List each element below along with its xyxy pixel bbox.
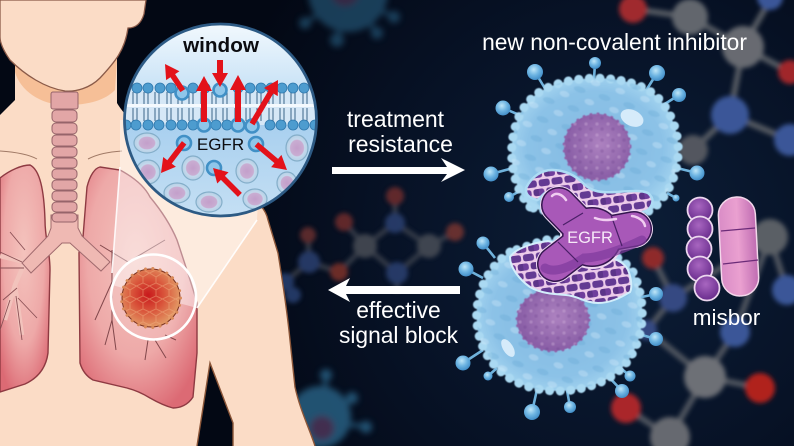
- arrow: left: [328, 278, 460, 302]
- EGFR shading: [545, 240, 642, 270]
- tumor mass: [122, 268, 180, 328]
- bottom cell receptors: [456, 236, 663, 420]
- background cell: bottom: [289, 369, 372, 446]
- magnifier label: EGFR: EGFR: [197, 135, 244, 154]
- inhibitor capsule: [717, 196, 760, 297]
- human body: [0, 0, 315, 446]
- EGFR label: EGFR: [567, 229, 613, 247]
- bottom cell highlight: [498, 337, 518, 359]
- bottom cell texture: [477, 240, 642, 391]
- left lung: [0, 165, 50, 392]
- top cell highlight: [618, 106, 646, 130]
- bottom cell body: [477, 240, 642, 391]
- arrow: right: [332, 158, 465, 182]
- top cell receptors: [484, 57, 704, 202]
- EGFR outer halo: [555, 205, 634, 267]
- right lung: [79, 167, 197, 408]
- label: effective signal block: effective: [356, 297, 441, 323]
- bottom cancer cell: [456, 236, 663, 420]
- top cell body: [512, 78, 678, 216]
- background molecule: centre: [276, 187, 464, 303]
- EGFR receptors: [176, 84, 263, 175]
- background molecule: upper right: [619, 0, 794, 165]
- EGFR protein: [545, 194, 645, 270]
- red arrows: [161, 60, 287, 197]
- EGFR body: [555, 205, 634, 264]
- EGFR dark outline: [555, 205, 634, 266]
- trachea: [22, 92, 110, 273]
- bronchial tree: right: [95, 240, 176, 360]
- tissue cells: [134, 133, 308, 212]
- clavicle lines: [0, 151, 122, 159]
- label: treatment resistance: resistance: [348, 131, 453, 157]
- neck shadow: [15, 60, 117, 105]
- label: treatment resistance: treatment: [347, 106, 444, 132]
- heading: new non-covalent inhibitor: new non-covalent inhibitor: [482, 29, 747, 55]
- head: [0, 0, 146, 91]
- tumor callout: [111, 254, 196, 340]
- membrane tails: [133, 92, 307, 121]
- membrane heads: [121, 83, 320, 130]
- background molecule: lower right: [611, 219, 794, 446]
- EGFR dividers: [558, 213, 622, 262]
- inhibitor bead chain: [686, 198, 720, 300]
- EGFR centre: [564, 208, 620, 266]
- bottom cell nucleus: [517, 289, 589, 351]
- EGFR highlights: [552, 194, 645, 226]
- top cell honeycomb band: [526, 170, 652, 215]
- magnifier circle: [120, 20, 322, 221]
- magnifier heading: window: window: [182, 34, 260, 57]
- magnifier cone edges: [112, 167, 257, 308]
- top cell texture: [512, 78, 678, 216]
- bottom cell honeycomb band: [510, 241, 631, 303]
- label: effective signal block: signal block: [339, 322, 459, 348]
- magnifier cone: [112, 120, 262, 308]
- top cancer cell: [484, 57, 704, 216]
- bronchial tree: left: [0, 232, 50, 340]
- label: misbor: misbor: [693, 305, 761, 330]
- background cell: top: [299, 0, 400, 47]
- top cell nucleus: [564, 114, 630, 180]
